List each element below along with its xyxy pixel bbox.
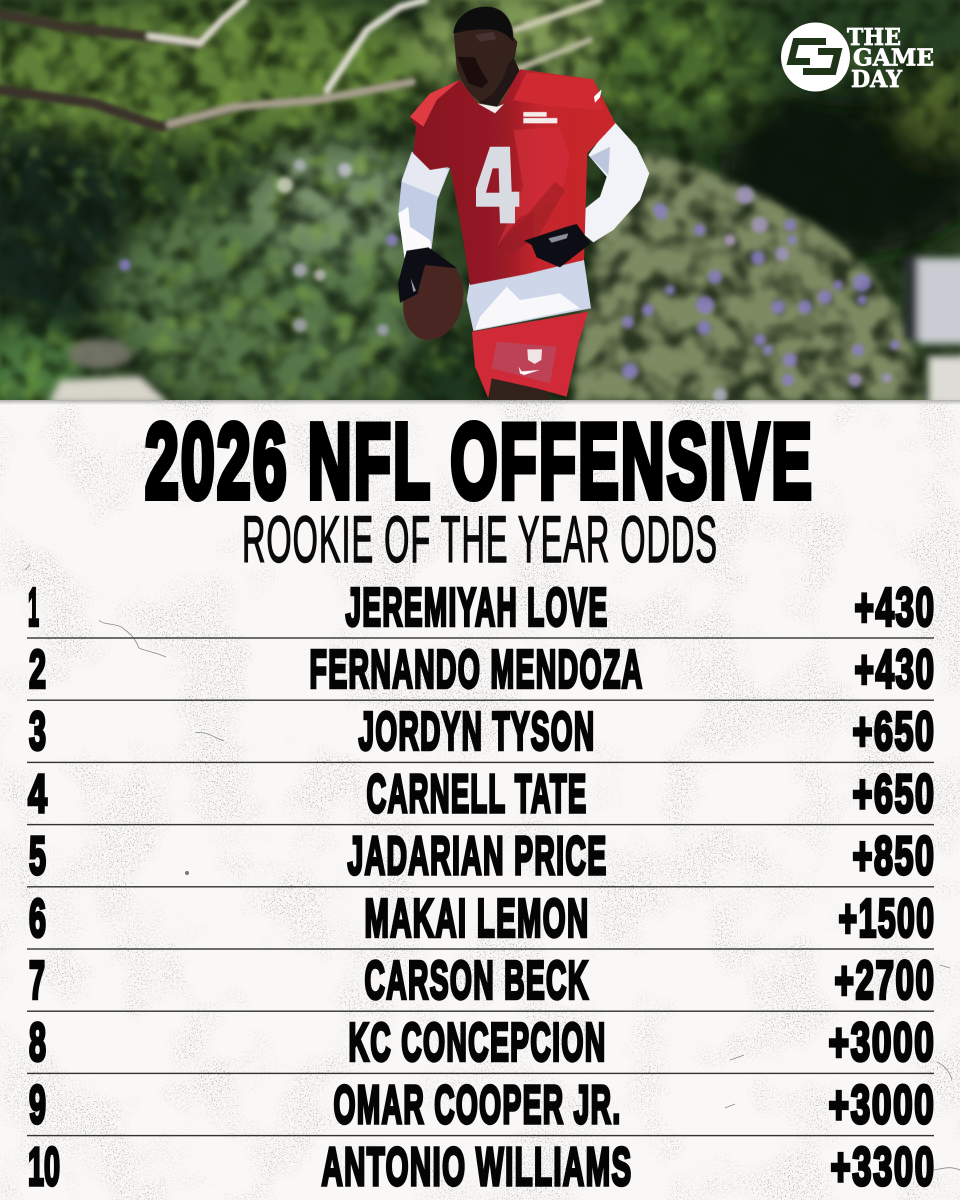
right glove <box>524 224 591 267</box>
logo wordmark: DAY <box>851 66 903 93</box>
photo background: blurred foliage <box>0 0 960 425</box>
logo wordmark <box>846 28 934 88</box>
left glove <box>398 247 457 303</box>
NFL shield and swoosh on shorts <box>519 349 542 375</box>
hair <box>453 7 513 42</box>
row 9: OMAR COOPER JR. <box>334 1075 622 1135</box>
row 8: KC CONCEPCION <box>348 1013 606 1073</box>
logo wordmark: THE <box>847 24 901 51</box>
row 4 <box>28 764 936 824</box>
row 1 <box>28 577 936 637</box>
row 8: 8 <box>29 1013 46 1073</box>
row 4: 4 <box>28 764 47 824</box>
shoulder swoosh <box>594 89 602 103</box>
row 5: JADARIAN PRICE <box>348 826 608 886</box>
red jersey <box>410 69 615 285</box>
white collar <box>477 103 504 113</box>
row 1: JEREMIYAH LOVE <box>346 577 608 637</box>
row 9 <box>29 1075 936 1135</box>
row 7 <box>29 950 936 1010</box>
player legs <box>490 378 550 400</box>
row 2 <box>29 640 936 700</box>
row 10 <box>28 1137 936 1197</box>
head <box>454 7 517 102</box>
row 2: 2 <box>29 640 46 700</box>
row 10: 10 <box>28 1137 60 1197</box>
row 5: 5 <box>29 826 46 886</box>
logo circle mark <box>781 22 850 92</box>
row 10: ANTONIO WILLIAMS <box>322 1137 632 1197</box>
row 2: FERNANDO MENDOZA <box>310 640 644 700</box>
white left sleeve <box>398 152 450 262</box>
photo: player running with a football in front of green bushes <box>0 0 960 425</box>
row 7: CARSON BECK <box>364 950 590 1010</box>
right flowering bush <box>572 150 926 402</box>
odds table <box>27 577 936 1197</box>
sponsor patch <box>523 112 557 123</box>
face shadows <box>457 57 488 88</box>
row 4: CARNELL TATE <box>366 764 588 824</box>
football <box>403 265 464 340</box>
row 9: 9 <box>29 1075 46 1135</box>
neck <box>470 57 520 107</box>
white right sleeve <box>568 121 649 242</box>
logo: The Game Day <box>781 22 934 93</box>
player figure <box>395 7 649 402</box>
row 6 <box>29 888 936 948</box>
logo wordmark: GAME <box>853 44 934 72</box>
jersey number 4 <box>476 147 519 223</box>
row 1: 1 <box>28 577 39 637</box>
white undershirt <box>467 260 591 331</box>
panel: paper odds table background <box>0 400 960 1200</box>
row 8 <box>29 1013 936 1073</box>
red shorts <box>472 312 588 398</box>
row 3 <box>29 702 936 762</box>
row 6: MAKAI LEMON <box>364 888 590 948</box>
row 3: JORDYN TYSON <box>358 702 596 762</box>
row 6: 6 <box>29 888 46 948</box>
row 3: 3 <box>29 702 46 762</box>
row 5 <box>29 826 936 886</box>
row 7: 7 <box>29 950 45 1010</box>
